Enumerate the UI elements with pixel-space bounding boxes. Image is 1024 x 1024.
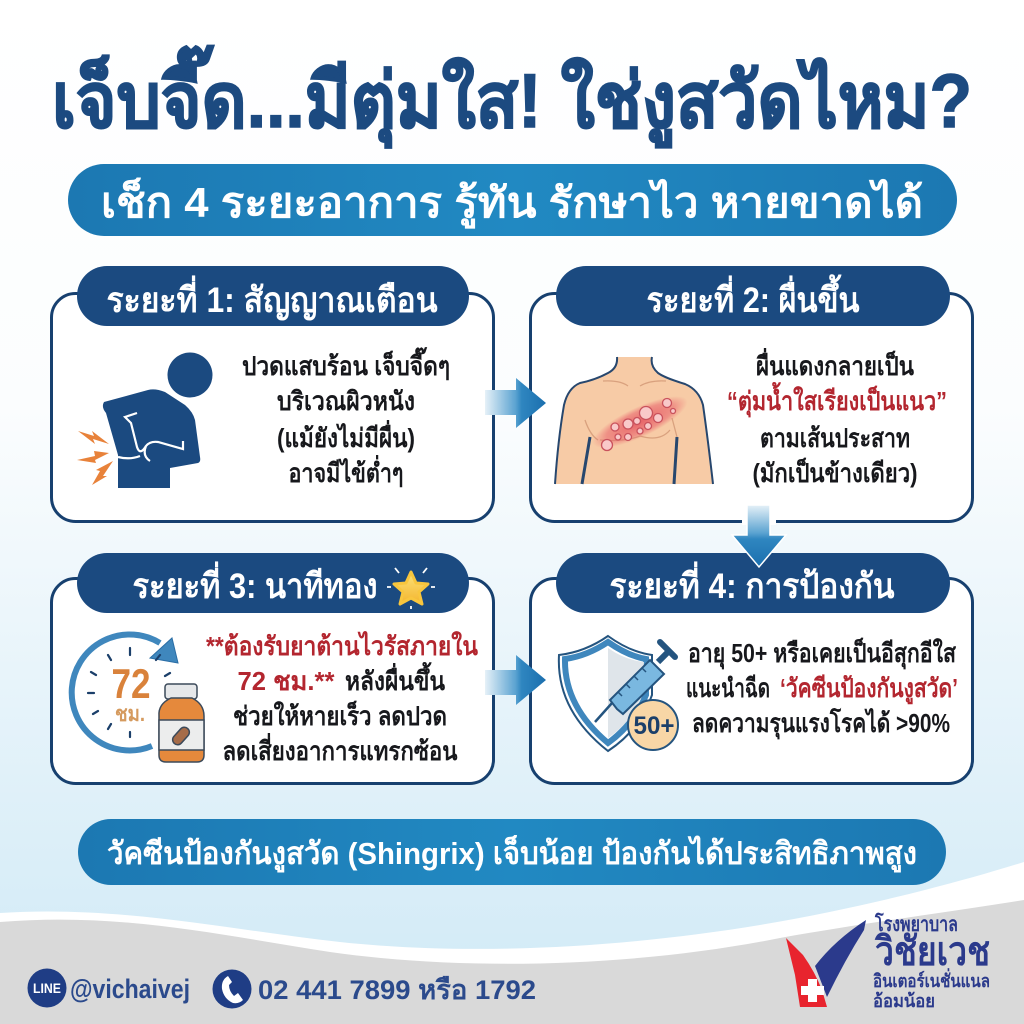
stage 4 text: อายุ 50+ หรือเคยเป็นอีสุกอีใส	[688, 637, 956, 670]
icon: medicine bottle	[159, 684, 204, 762]
stage 2 text	[727, 347, 947, 488]
icon: 72 hour clock: ชม.	[115, 703, 145, 726]
stage 3 text: ช่วยให้หายเร็ว ลดปวด	[233, 700, 447, 731]
icon: person in pain	[77, 352, 212, 488]
contact: LINE: @vichaivej	[70, 974, 190, 1004]
stage 4 heading	[556, 553, 950, 613]
panel: stage 2	[530, 266, 972, 522]
contact: phone	[212, 970, 536, 1008]
panel: stage 3	[52, 553, 494, 784]
panel: stage 1	[52, 266, 494, 522]
stage 1 heading	[77, 266, 469, 326]
logo: Vichaivej hospital: วิชัยเวช	[875, 930, 990, 974]
panel: stage 4	[530, 553, 972, 784]
stage 4 text: ลดความรุนแรงโรคได้ >90%	[692, 707, 950, 740]
stage 3 text: ลดเสี่ยงอาการแทรกซ้อน	[222, 732, 458, 766]
logo: Vichaivej hospital: โรงพยาบาล	[874, 912, 958, 936]
arrow: stage 3 to stage 4	[485, 655, 546, 705]
subtitle banner	[68, 164, 957, 236]
stage 4 text: แนะนำฉีด	[686, 673, 770, 703]
stage 3 text: **ต้องรับยาต้านไวรัสภายใน	[206, 630, 478, 661]
stage 1 text: บริเวณผิวหนัง	[277, 386, 415, 416]
stage 2 text: “ตุ่มน้ำใสเรียงเป็นแนว”	[727, 381, 947, 418]
icon: 72 hour clock: 72	[112, 660, 150, 707]
badge: 50+: 50+	[634, 712, 674, 740]
footer wave	[0, 862, 1024, 1024]
icon: 72 hour clock	[72, 634, 204, 762]
logo: Vichaivej hospital: อินเตอร์เนชั่นแนล	[873, 968, 990, 991]
stage 2 text: (มักเป็นข้างเดียว)	[752, 457, 918, 488]
stage 3 text: 72 ชม.**	[238, 666, 335, 696]
contact: phone: 02 441 7899 หรือ 1792	[258, 975, 536, 1005]
arrow: stage 2 to stage 4	[732, 505, 786, 567]
stage 4 text	[686, 637, 958, 740]
stage 3 heading: ระยะที่ 3: นาทีทอง	[132, 561, 378, 606]
stage 4 text: ‘วัคซีนป้องกันงูสวัด’	[780, 673, 958, 705]
stage 1 text: อาจมีไข้ต่ำๆ	[288, 454, 404, 488]
illustration: chest with shingles rash	[555, 357, 713, 484]
stage 3 text: หลังผื่นขึ้น	[345, 661, 445, 696]
subtitle banner: เช็ก 4 ระยะอาการ รู้ทัน รักษาไว หายขาดได้	[101, 177, 923, 229]
logo: Vichaivej hospital: อ้อมน้อย	[873, 991, 935, 1011]
stage 1 text: ปวดแสบร้อน เจ็บจี๊ดๆ	[242, 347, 450, 381]
arrow: stage 1 to stage 2	[485, 378, 546, 428]
icon: gold star	[387, 568, 435, 609]
contact: LINE: LINE	[33, 980, 61, 996]
stage 2 heading: ระยะที่ 2: ผื่นขึ้น	[646, 274, 860, 320]
stage 1 text	[242, 347, 450, 488]
contact: LINE	[28, 968, 190, 1008]
stage 1 text: (แม้ยังไม่มีผื่น)	[277, 419, 415, 453]
bottom banner: วัคซีนป้องกันงูสวัด (Shingrix) เจ็บน้อย ป้องกันได้ประสิทธิภาพสูง	[107, 834, 917, 873]
stage 3 heading	[77, 553, 469, 613]
stage 2 heading	[556, 266, 950, 326]
stage 2 text: ตามเส้นประสาท	[760, 423, 910, 453]
stage 1 heading: ระยะที่ 1: สัญญาณเตือน	[106, 275, 438, 321]
logo: Vichaivej hospital	[786, 912, 990, 1011]
stage 3 text	[206, 630, 478, 766]
stage 4 heading: ระยะที่ 4: การป้องกัน	[610, 561, 895, 606]
icon: shield with syringe	[559, 636, 678, 751]
bottom banner	[78, 819, 946, 885]
stage 2 text: ผื่นแดงกลายเป็น	[756, 347, 914, 381]
